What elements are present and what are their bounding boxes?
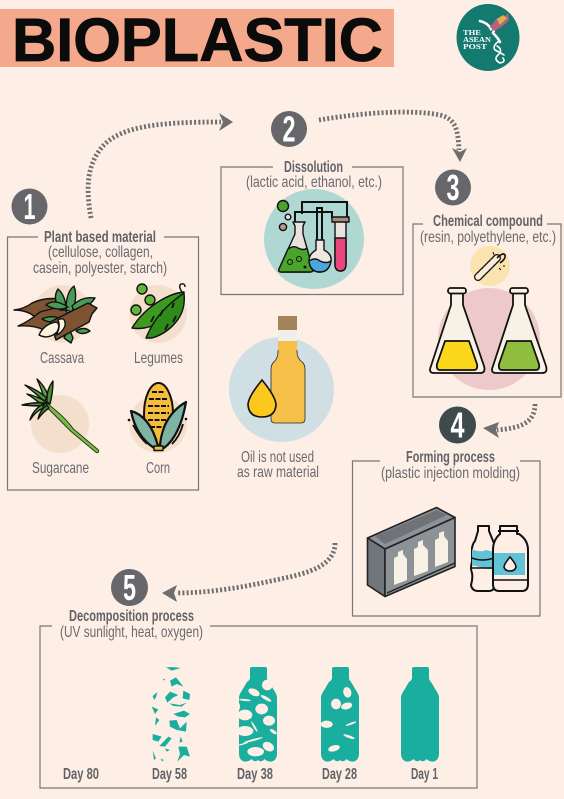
step number 5: 5 xyxy=(123,567,136,608)
logo: The ASEAN Post: POST xyxy=(463,42,487,51)
step number 3 xyxy=(435,167,471,208)
icon: legumes xyxy=(129,284,187,343)
label: sugarcane: Sugarcane xyxy=(32,460,89,477)
arrow: step 1 to step 2 xyxy=(88,113,233,218)
step number 3: 3 xyxy=(446,167,460,208)
icon: finished bottles xyxy=(471,526,528,591)
bottle: day 28 xyxy=(321,667,359,762)
oil note text: as raw material xyxy=(237,464,319,481)
label: day 58: Day 58 xyxy=(152,766,187,783)
bottle: day 58 fragments xyxy=(152,667,190,762)
label: corn: Corn xyxy=(146,460,170,477)
arrow: step 4 to step 5 xyxy=(162,543,335,602)
panel 4 frame xyxy=(352,461,540,616)
panel 5 heading: Decomposition process xyxy=(69,608,194,625)
icon: cassava xyxy=(14,285,97,343)
label: day 38: Day 38 xyxy=(237,766,273,783)
icon: molecule chain xyxy=(470,246,510,286)
arrow: step 2 to step 3 xyxy=(319,112,467,162)
label: cassava: Cassava xyxy=(40,350,84,367)
oil note text: Oil is not used xyxy=(241,449,314,466)
panel 3 frame xyxy=(413,224,561,397)
bottle: day 1 xyxy=(401,667,439,762)
icon: oil bottle and drop xyxy=(229,316,334,442)
step number 2 xyxy=(271,108,307,150)
icon: laboratory glassware xyxy=(264,189,364,289)
step number 1 xyxy=(12,186,48,227)
bottle: day 38 xyxy=(235,667,278,762)
panel 2 frame xyxy=(221,167,403,294)
panel 5 frame xyxy=(40,626,477,788)
icon: injection mould xyxy=(368,508,455,596)
step number 4: 4 xyxy=(450,404,464,446)
icon: sugarcane xyxy=(22,379,97,453)
panel 1 subheading: (cellulose, collagen, xyxy=(48,244,153,261)
panel 1 heading: Plant based material xyxy=(44,229,156,246)
panel 1 frame xyxy=(8,237,198,490)
logo: The ASEAN Post: THE xyxy=(463,28,481,37)
step number 4 xyxy=(439,404,476,446)
step number 1: 1 xyxy=(24,186,36,227)
callout: oil is not used xyxy=(229,316,334,481)
icon: corn xyxy=(128,383,187,453)
panel 5 subheading: (UV sunlight, heat, oxygen) xyxy=(60,624,203,641)
panel 2: dissolution xyxy=(221,108,403,294)
panel 4 subheading: (plastic injection molding) xyxy=(381,465,520,482)
panel 1 subheading: casein, polyester, starch) xyxy=(33,260,167,277)
panel 2 subheading: (lactic acid, ethanol, etc.) xyxy=(246,174,382,191)
label: day 28: Day 28 xyxy=(322,766,357,783)
panel 4: forming process xyxy=(352,404,540,616)
title banner: BIOPLASTIC xyxy=(12,6,383,74)
icon: green flask xyxy=(492,288,546,373)
panel 3: chemical compound xyxy=(413,167,561,397)
oil note text xyxy=(237,449,319,481)
logo: The ASEAN Post: ASEAN xyxy=(463,35,492,44)
label: day 80: Day 80 xyxy=(63,766,99,783)
panel 1: plant based material xyxy=(8,186,198,490)
logo: The ASEAN Post xyxy=(456,4,520,71)
icon: pink backdrop circle xyxy=(438,288,540,390)
step number 5 xyxy=(111,567,148,608)
panel 2 heading: Dissolution xyxy=(284,159,343,176)
arrow: step 3 to step 4 xyxy=(483,404,535,438)
panel 1 subheading xyxy=(33,244,167,277)
panel 4 heading: Forming process xyxy=(406,449,495,466)
label: day 1: Day 1 xyxy=(411,766,438,783)
label: legumes: Legumes xyxy=(134,350,183,367)
panel 5: decomposition process xyxy=(40,567,477,788)
step number 2: 2 xyxy=(282,108,296,150)
icon: yellow flask xyxy=(430,288,484,373)
